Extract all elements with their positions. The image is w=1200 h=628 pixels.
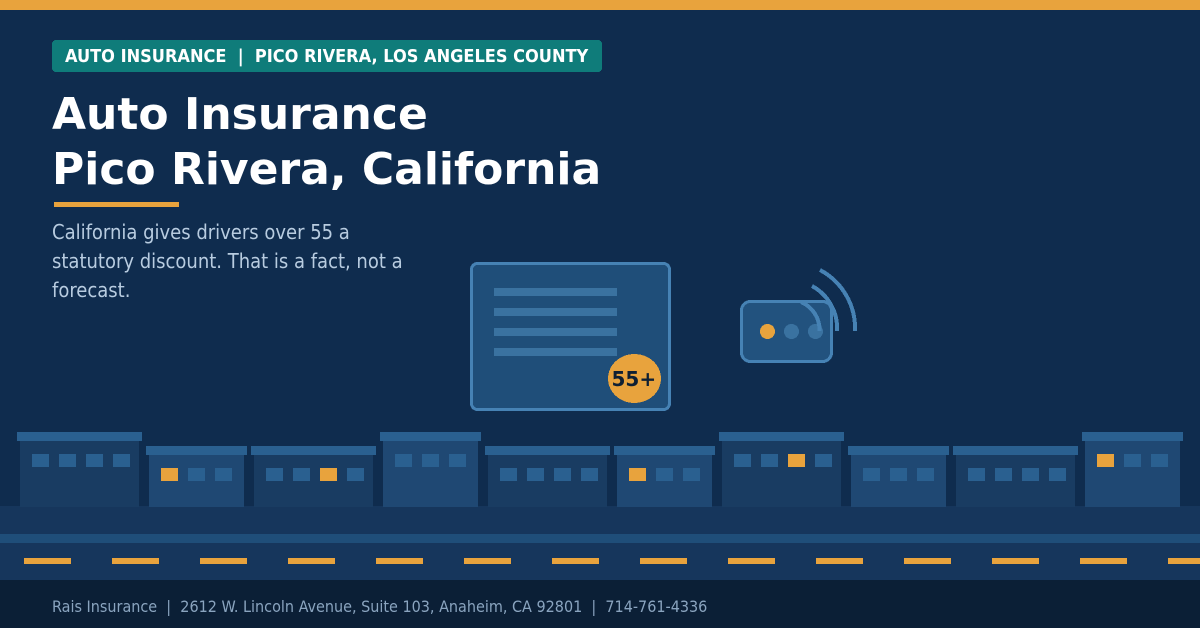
building 6 (614, 446, 715, 507)
intro text: California gives drivers over 55 a (52, 220, 350, 244)
icon: policy document with 55+ badge: 55+ (612, 367, 656, 391)
top accent bar (0, 0, 1200, 10)
building 3 (251, 446, 376, 507)
streetscape: row of buildings (17, 432, 1183, 507)
icon: telematics device with signal arcs (742, 270, 855, 362)
building 10 (1082, 432, 1183, 507)
building 5 (485, 446, 610, 507)
category badge (52, 40, 602, 72)
building 9 (953, 446, 1078, 507)
building 2 (146, 446, 247, 507)
title: Pico Rivera, California (52, 144, 601, 195)
intro text: forecast. (52, 278, 130, 302)
footer (0, 580, 1200, 628)
title (52, 89, 601, 195)
building 8 (848, 446, 949, 507)
building 7 (719, 432, 844, 507)
category badge: AUTO INSURANCE | PICO RIVERA, LOS ANGELES COUNTY (65, 46, 589, 67)
title underline (54, 202, 179, 207)
intro text (52, 220, 403, 302)
road with sidewalk and lane dashes (0, 506, 1200, 580)
building 1 (17, 432, 142, 507)
building 4 (380, 432, 481, 507)
footer: Rais Insurance | 2612 W. Lincoln Avenue, Suite 103, Anaheim, CA 92801 | 714-761-4336 (52, 597, 707, 616)
icon: policy document with 55+ badge (472, 264, 670, 410)
intro text: statutory discount. That is a fact, not a (52, 249, 403, 273)
title: Auto Insurance (52, 89, 428, 140)
